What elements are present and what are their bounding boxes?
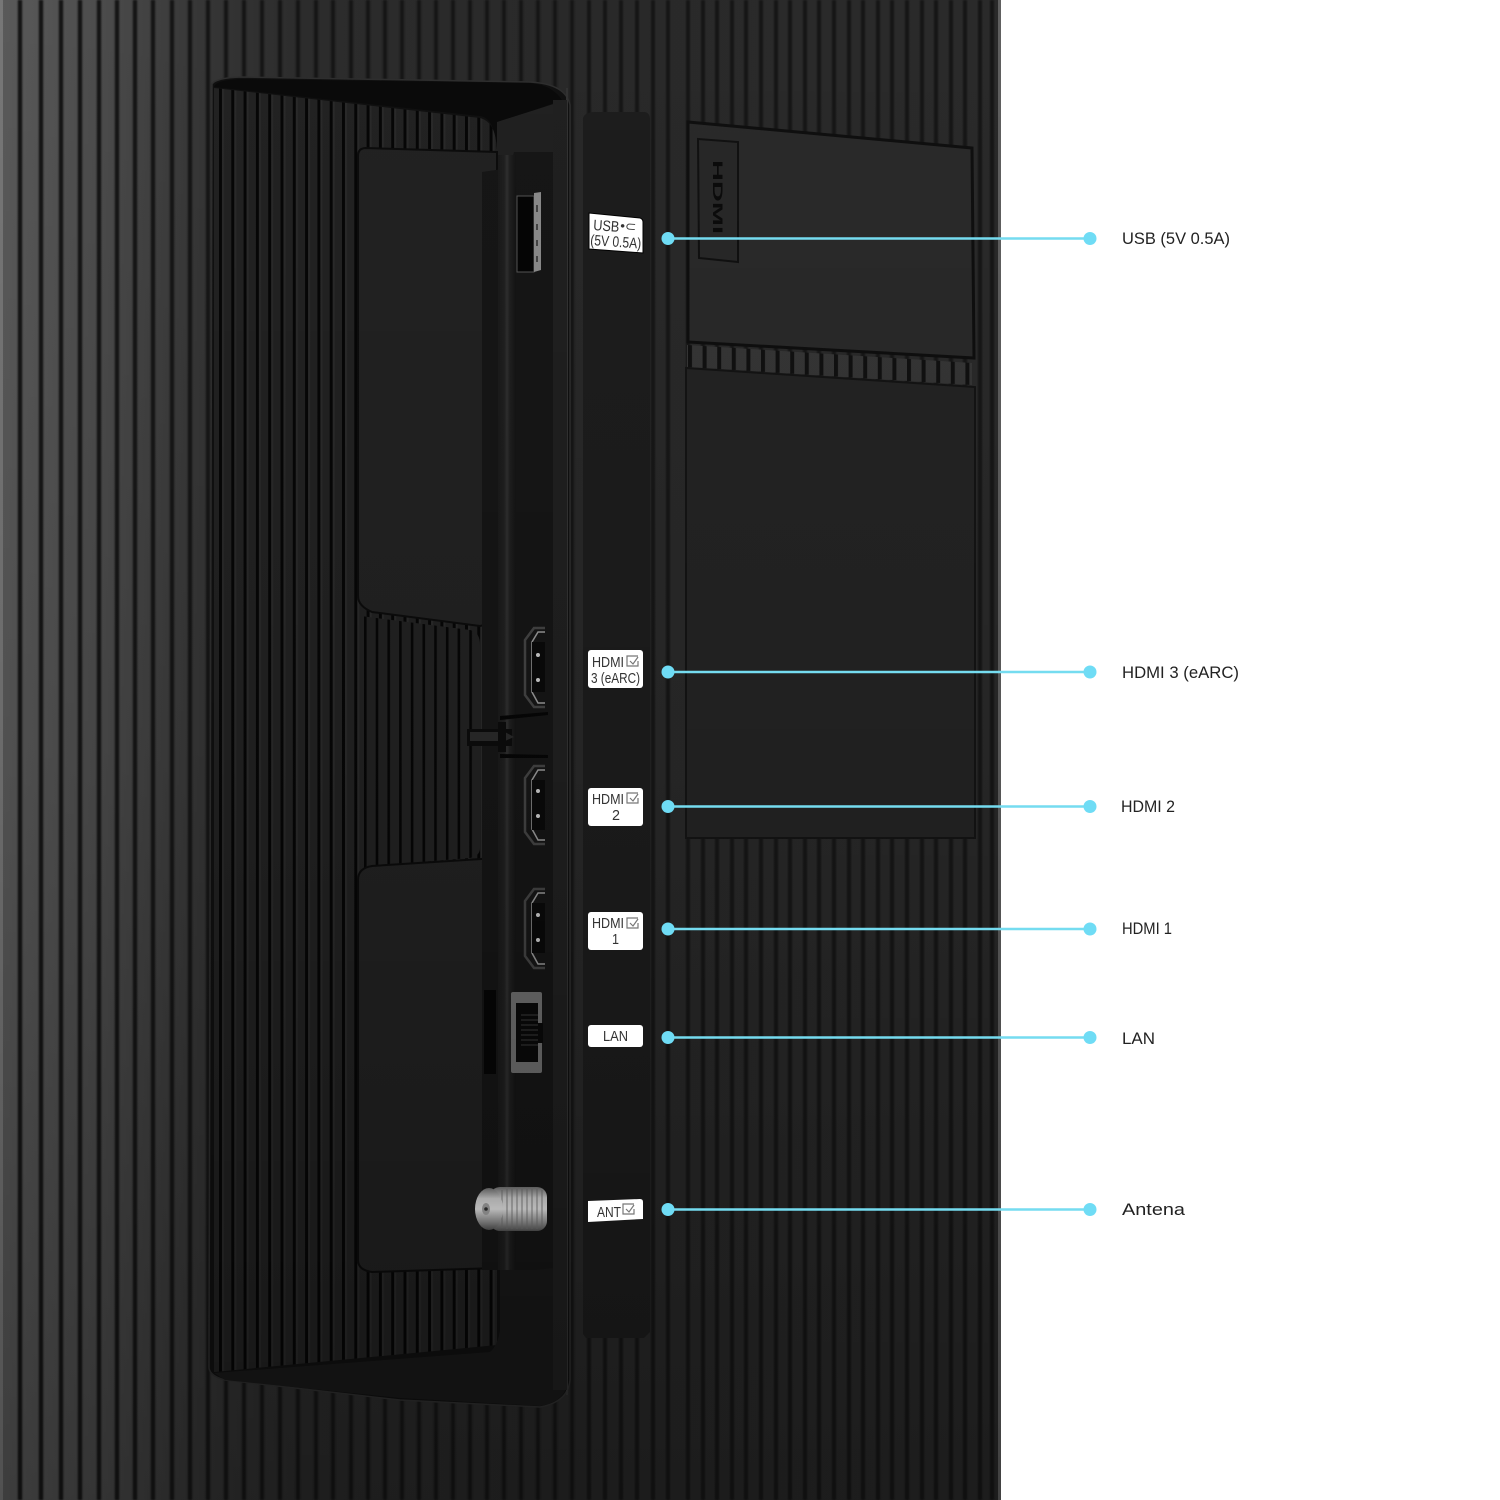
caption: HDMI 1: HDMI 1 bbox=[1122, 919, 1172, 938]
caption: USB: USB (5V 0.5A) bbox=[1122, 229, 1230, 248]
icon: antenna connector bbox=[475, 1187, 547, 1231]
icon: embossed HDMI logo: HDMI bbox=[710, 160, 726, 234]
panel: recessed port cavity bbox=[209, 77, 570, 1407]
tag: HDMI 2: 2 bbox=[612, 807, 620, 824]
icon: LAN port bbox=[484, 990, 543, 1074]
tag: LAN: LAN bbox=[603, 1028, 628, 1045]
tag: HDMI 2: HDMI bbox=[592, 791, 624, 808]
callout: Antenna leader line bbox=[662, 1203, 1096, 1216]
panel: lower cover plate bbox=[358, 858, 497, 1272]
tag: HDMI 3: 3 (eARC) bbox=[591, 670, 640, 687]
icon: HDMI 1 port bbox=[525, 889, 545, 968]
panel: lower right plate bbox=[686, 368, 975, 838]
icon: HDMI 3 port bbox=[525, 628, 545, 707]
callout: HDMI 1 leader line bbox=[662, 922, 1096, 936]
panel: top right plate bbox=[688, 122, 974, 358]
tag: USB: USB bbox=[593, 217, 620, 236]
callout: USB leader line bbox=[662, 232, 1096, 245]
tag: LAN bbox=[588, 1025, 643, 1047]
tag: HDMI 3: HDMI bbox=[592, 654, 624, 671]
tag: HDMI 3 bbox=[588, 650, 643, 688]
teeth between right plates bbox=[687, 345, 972, 385]
icon: cable clip bbox=[467, 712, 548, 758]
panel: ribbed TV back bbox=[0, 0, 1001, 1500]
tag: ANT: ANT bbox=[597, 1204, 621, 1221]
icon: HDMI 2 port bbox=[525, 766, 545, 844]
panel: white caption area bbox=[1000, 0, 1500, 1500]
tag: HDMI 1: HDMI bbox=[592, 915, 624, 932]
caption: Antenna: Antena bbox=[1122, 1200, 1186, 1219]
tag: USB: (5V 0.5A) bbox=[590, 232, 642, 253]
tag: USB bbox=[589, 213, 643, 253]
caption: LAN: LAN bbox=[1122, 1029, 1155, 1048]
tag: HDMI 1: 1 bbox=[612, 931, 619, 948]
tag: ANT bbox=[588, 1199, 643, 1222]
cavity floor bbox=[214, 1260, 568, 1406]
overlay: vertical shading bbox=[0, 0, 1001, 1500]
cavity ceiling bbox=[214, 79, 562, 150]
panel: label bar bbox=[583, 112, 650, 1338]
panel: upper cover plate bbox=[358, 148, 497, 626]
icon: USB port bbox=[517, 192, 541, 272]
ribs: cavity wall bbox=[214, 88, 497, 1372]
callout: HDMI 2 leader line bbox=[662, 800, 1096, 813]
tag: USB: •⊂ bbox=[620, 218, 637, 234]
callout: LAN leader line bbox=[662, 1031, 1096, 1044]
ribs: middle section bbox=[361, 616, 480, 878]
tag: HDMI 1 bbox=[588, 912, 643, 950]
callout: HDMI 3 leader line bbox=[662, 666, 1096, 678]
caption: HDMI 2: HDMI 2 bbox=[1121, 797, 1175, 816]
caption: HDMI 3: HDMI 3 (eARC) bbox=[1122, 663, 1239, 682]
panel: connector strip bbox=[482, 100, 567, 1390]
icon: embossed HDMI logo bbox=[698, 139, 738, 262]
tag: HDMI 2 bbox=[588, 788, 643, 826]
